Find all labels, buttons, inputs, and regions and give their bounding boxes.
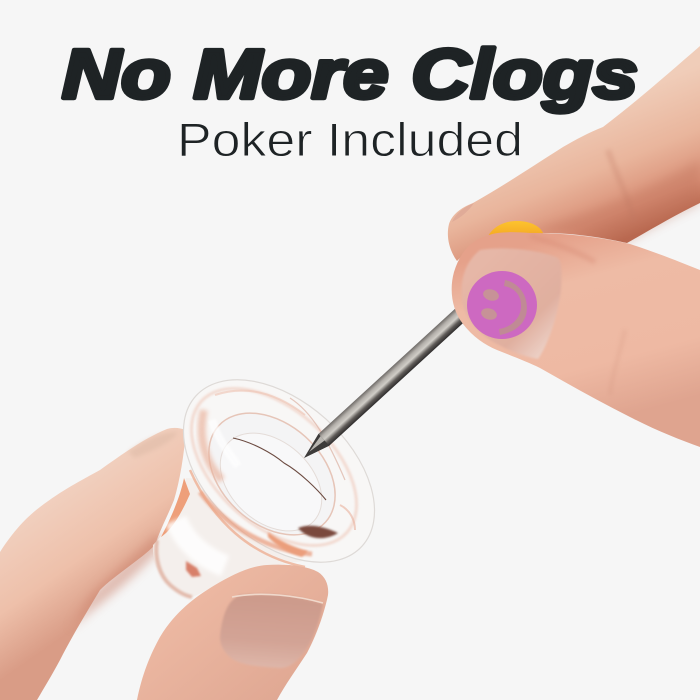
smiley sticker (467, 271, 537, 339)
glass rim (149, 344, 409, 598)
left finger (0, 428, 186, 700)
lower finger with nail (452, 232, 700, 447)
thumbnail (220, 594, 323, 668)
glass bowl piece (149, 344, 409, 598)
poker shaft (299, 307, 468, 464)
index finger (448, 46, 700, 261)
glass colored reflections (202, 410, 222, 480)
thumb (137, 565, 328, 700)
glass body (153, 478, 310, 598)
fingernail (462, 248, 562, 359)
title: No More Clogs (62, 35, 638, 113)
poker tool (299, 307, 468, 464)
subtitle: Poker Included (177, 113, 523, 166)
yellow bead (486, 221, 543, 245)
